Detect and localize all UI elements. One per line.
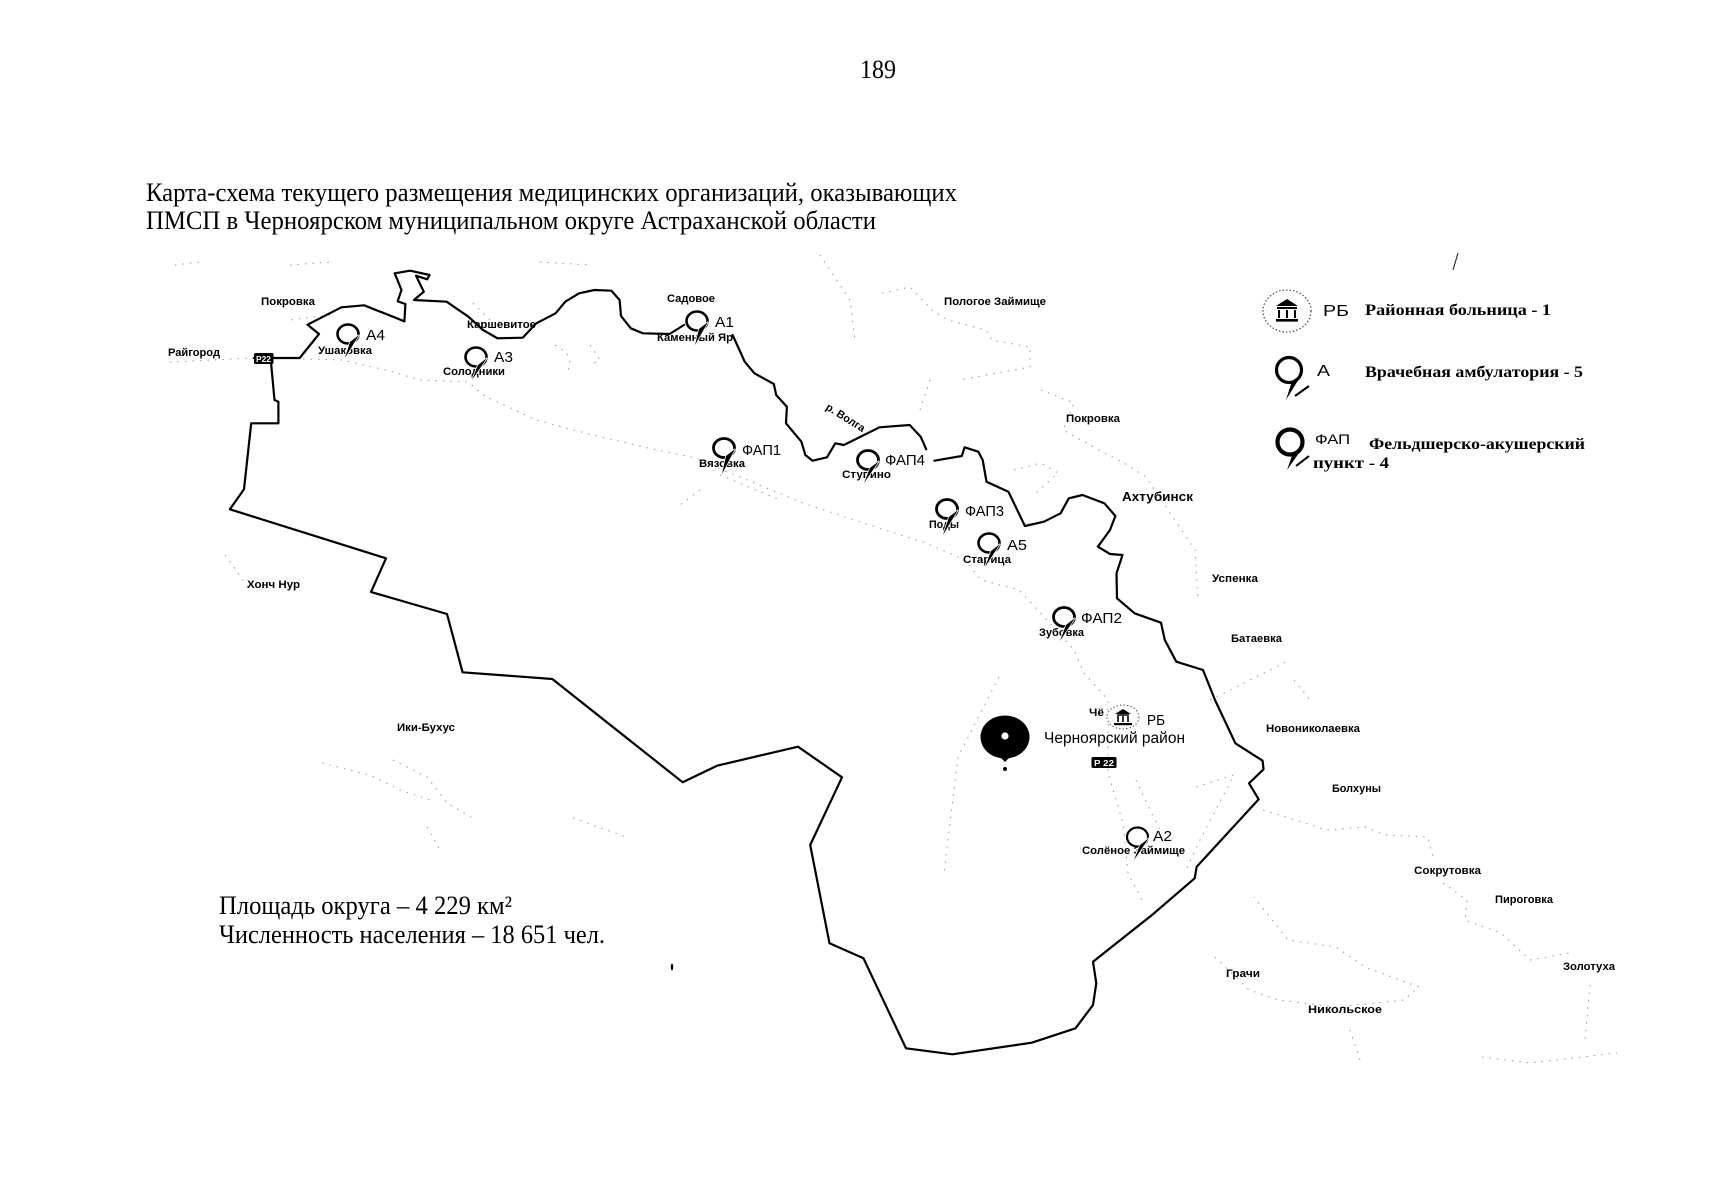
pin FAP4 [842,450,925,483]
outside settlement labels: Успенка [1212,573,1259,585]
legend [1263,290,1585,472]
pin FAP2: ФАП2 [1081,610,1122,627]
pin A2: А2 [1153,828,1172,845]
pin FAP1 [699,438,781,474]
pin A4 [318,324,385,358]
pin A1: А1 [715,314,734,331]
title: ПМСП в Черноярском муниципальном округе Астраханской области [146,206,876,235]
area and population: Площадь округа – 4 229 км² [219,891,512,920]
pin A1 [657,312,734,345]
big black district marker [980,716,1030,771]
legend row: ambulatory: Врачебная амбулатория - 5 [1365,364,1583,381]
legend row: feldsher point: пункт - 4 [1313,455,1389,472]
legend row: ambulatory: А [1317,363,1330,380]
river label: р. Волга [823,401,868,435]
outside settlement labels: Никольское [1308,1004,1382,1016]
pin A5 [963,534,1027,567]
area and population: Численность населения – 18 651 чел. [219,920,605,949]
legend row: district hospital [1323,302,1551,320]
outside settlement labels [168,293,1616,1016]
outside settlement labels: Ики-Бухус [397,722,455,734]
outside settlement labels: Пологое Займище [944,296,1046,308]
legend icon: ambulatory pin [1276,358,1309,400]
legend row: ambulatory [1317,363,1583,381]
pin A5: Старица [963,554,1012,566]
title [146,178,957,235]
pin A4: А4 [366,327,385,344]
pin FAP3: Поды [929,519,959,531]
area and population [219,891,605,949]
pin FAP2 [1039,608,1122,641]
outside settlement labels: Новониколаевка [1266,723,1361,735]
outside settlement labels: Покровка [1066,413,1121,425]
outside settlement labels: Садовое [667,293,715,305]
pin FAP3 [929,500,1004,535]
legend row: feldsher point [1313,431,1585,472]
pin A3: А3 [494,349,513,366]
pin A3 [443,348,513,380]
stray scan mark [1453,253,1458,270]
title: Карта-схема текущего размещения медицинских организаций, оказывающих [146,178,957,207]
stray scan speck [671,964,673,970]
pin FAP1: ФАП1 [742,442,781,459]
faint roads and rivers [170,255,1617,1063]
pin A4: Ушаковка [318,345,373,357]
pin A3: Солодники [443,366,505,378]
pin FAP1: Вязовка [699,458,746,470]
central hospital marker RB [1089,705,1165,729]
legend icon: feldsher pin [1278,430,1309,470]
pin FAP3: ФАП3 [965,503,1004,520]
pin FAP4: ФАП4 [885,452,925,469]
road shield R22 west [254,353,274,364]
district name: Черноярский район [1044,730,1185,747]
outside settlement labels: Ахтубинск [1122,489,1194,504]
outside settlement labels: Батаевка [1231,633,1283,645]
outside settlement labels: Сокрутовка [1414,865,1482,877]
outside settlement labels: Болхуны [1332,783,1381,795]
road shield R22 [1092,757,1116,768]
legend icon: hospital [1263,290,1311,332]
pin FAP4: Ступино [842,469,891,481]
outside settlement labels: Золотуха [1563,961,1616,973]
pin A2 [1082,828,1185,860]
outside settlement labels: Каршевитое [467,319,536,331]
legend row: feldsher point: Фельдшерско-акушерский [1369,436,1585,453]
district boundary [230,271,1263,1054]
legend row: district hospital: РБ [1323,303,1349,320]
road shield R22: Р 22 [1094,759,1115,768]
outside settlement labels: Грачи [1226,968,1260,980]
central hospital marker RB: РБ [1147,712,1165,729]
road shield R22 west: Р22 [256,355,272,364]
legend row: district hospital: Районная больница - 1 [1365,302,1551,319]
outside settlement labels: Пироговка [1495,894,1554,906]
pin A5: А5 [1007,537,1027,554]
central hospital marker RB: Чё [1089,707,1104,719]
outside settlement labels: Хонч Нур [247,579,300,591]
pin A1: Каменный Яр [657,332,733,344]
outside settlement labels: Райгород [168,347,220,359]
pin A2: Солёное Займище [1082,845,1185,857]
pin FAP2: Зубовка [1039,627,1085,639]
page number: 189 [860,55,896,84]
legend row: feldsher point: ФАП [1315,431,1350,447]
outside settlement labels: Покровка [261,296,316,308]
